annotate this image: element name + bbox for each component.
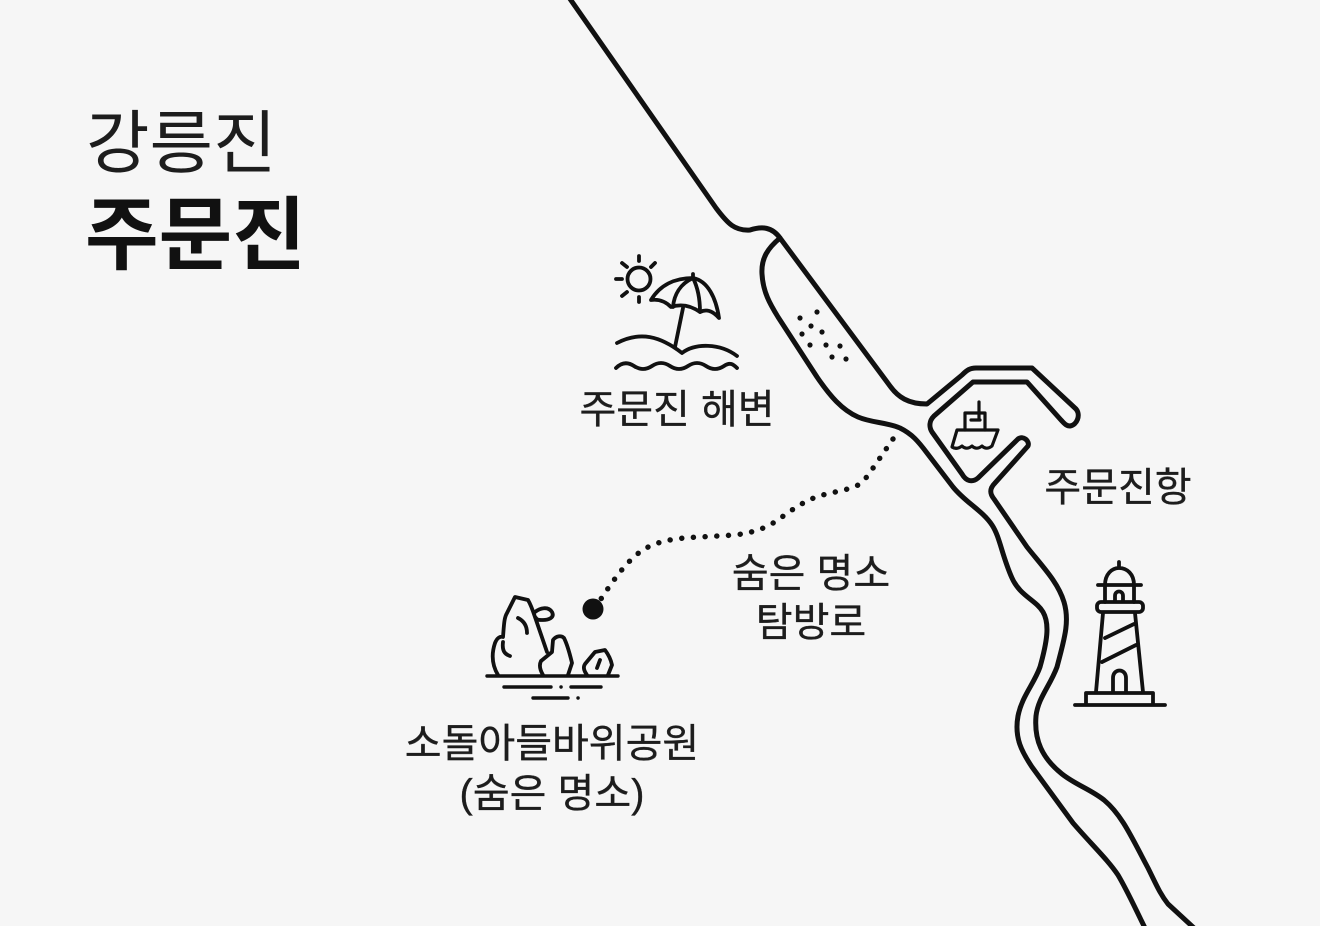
label: trail (732, 552, 890, 645)
dotted trail (597, 439, 893, 605)
label: trail: 숨은 명소 (732, 552, 890, 596)
coastline with harbor breakwaters (568, 0, 1194, 926)
beach sand dots (797, 309, 849, 362)
icon: rocks (493, 597, 612, 675)
title: 주문진 (85, 191, 306, 280)
label: harbor: 주문진항 (1044, 466, 1192, 510)
title (85, 105, 306, 280)
icon: lighthouse (1075, 562, 1165, 705)
icon: beach umbrella (616, 274, 737, 369)
label: trail: 탐방로 (756, 601, 866, 645)
trail start marker (582, 598, 604, 620)
label: rock park: 소돌아들바위공원 (405, 722, 699, 766)
icon: waterline under rocks (487, 676, 618, 698)
label: rock park: (숨은 명소) (460, 772, 644, 816)
title: 강릉진 (86, 105, 276, 182)
icon: boat (952, 402, 998, 448)
label: rock park (405, 722, 699, 816)
icon: sun (616, 256, 655, 302)
label: beach: 주문진 해변 (579, 388, 775, 432)
